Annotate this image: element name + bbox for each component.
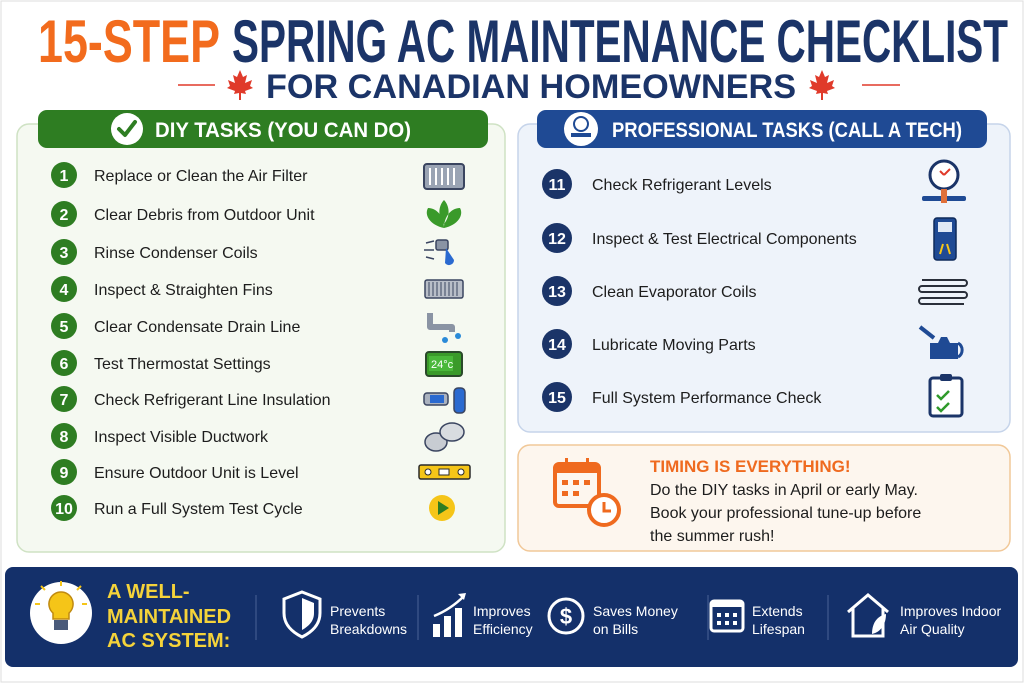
- list: DIY steps: Replace or Clean the Air Filter: [94, 168, 308, 185]
- banner: benefits: [5, 567, 1018, 667]
- callout: timing is everything: Book your professional tune-up before: [650, 505, 921, 522]
- benefit: improves efficiency: Improves: [473, 603, 531, 619]
- icons: DIY: [419, 164, 470, 521]
- benefit: improves indoor air quality: [848, 595, 1001, 637]
- icons: DIY: 24°c: [431, 359, 454, 371]
- list: professional steps: Clean Evaporator Coils: [592, 284, 757, 301]
- callout: timing is everything: [518, 445, 1010, 551]
- list: DIY steps: Inspect Visible Ductwork: [94, 429, 269, 446]
- list: professional steps: Lubricate Moving Parts: [592, 337, 756, 354]
- list: professional steps: Inspect & Test Electrical Components: [592, 231, 857, 248]
- heading: DIY tasks: DIY TASKS (YOU CAN DO): [155, 119, 411, 142]
- list: DIY steps: 6: [60, 356, 69, 373]
- list: professional steps: Check Refrigerant Levels: [592, 177, 772, 194]
- list: professional steps: 14: [548, 337, 566, 354]
- list: DIY steps: Check Refrigerant Line Insulation: [94, 392, 331, 409]
- list: DIY steps: Ensure Outdoor Unit is Level: [94, 465, 299, 482]
- list: professional steps: [542, 169, 857, 412]
- heading: professional tasks: [537, 110, 987, 148]
- list: DIY steps: Clear Condensate Drain Line: [94, 319, 300, 336]
- benefit: improves efficiency: [433, 593, 533, 637]
- list: professional steps: 11: [549, 177, 566, 194]
- heading: professional tasks: PROFESSIONAL TASKS (CALL A TECH): [612, 119, 962, 142]
- list: DIY steps: Run a Full System Test Cycle: [94, 501, 303, 518]
- panel: DIY tasks: [17, 110, 505, 552]
- list: DIY steps: Inspect & Straighten Fins: [94, 282, 273, 299]
- benefit: saves money: Saves Money: [593, 603, 678, 619]
- list: professional steps: Full System Performance Check: [592, 390, 822, 407]
- list: DIY steps: 10: [55, 501, 73, 518]
- benefit: extends lifespan: [711, 601, 805, 637]
- list: DIY steps: [51, 162, 331, 521]
- benefit: saves money: on Bills: [593, 621, 638, 637]
- icon: maple leaf right: [809, 70, 835, 100]
- benefit: saves money: [549, 599, 678, 637]
- list: DIY steps: 1: [60, 168, 69, 185]
- text: a well-maintained ac system: MAINTAINED: [107, 606, 231, 628]
- benefit: improves efficiency: Efficiency: [473, 621, 533, 637]
- callout: timing is everything: Do the DIY tasks in April or early May.: [650, 482, 918, 499]
- list: DIY steps: Rinse Condenser Coils: [94, 245, 258, 262]
- benefit: prevents breakdowns: Breakdowns: [330, 621, 407, 637]
- list: DIY steps: Clear Debris from Outdoor Unit: [94, 207, 315, 224]
- list: DIY steps: 7: [60, 392, 69, 409]
- icon: calendar clock: [555, 458, 619, 525]
- benefit: prevents breakdowns: [284, 592, 407, 637]
- icon: light bulb: [30, 581, 92, 644]
- text: a well-maintained ac system: [107, 581, 231, 652]
- subtitle: FOR CANADIAN HOMEOWNERS: [266, 68, 796, 106]
- icon: maple leaf left: [227, 70, 253, 100]
- callout: timing is everything: the summer rush!: [650, 528, 774, 545]
- text: a well-maintained ac system: A WELL-: [107, 581, 190, 603]
- list: DIY steps: 2: [60, 207, 69, 224]
- benefit: prevents breakdowns: Prevents: [330, 603, 385, 619]
- text: a well-maintained ac system: AC SYSTEM:: [107, 630, 230, 652]
- benefit: improves indoor air quality: Improves Indoor: [900, 603, 1001, 619]
- title: 15-STEP: [38, 8, 220, 75]
- benefit: extends lifespan: Extends: [752, 603, 803, 619]
- list: DIY steps: 4: [60, 282, 69, 299]
- benefit: extends lifespan: Lifespan: [752, 621, 805, 637]
- list: professional steps: 13: [548, 284, 566, 301]
- list: DIY steps: Test Thermostat Settings: [94, 356, 271, 373]
- list: DIY steps: 5: [60, 319, 69, 336]
- list: DIY steps: 9: [60, 465, 69, 482]
- list: DIY steps: 8: [60, 429, 69, 446]
- icons: professional: [919, 161, 967, 416]
- panel: professional tasks: [518, 110, 1010, 432]
- list: professional steps: 12: [548, 231, 566, 248]
- benefit: improves indoor air quality: Air Quality: [900, 621, 965, 637]
- list: professional steps: 15: [548, 390, 566, 407]
- heading: DIY tasks: [38, 110, 488, 148]
- benefit: saves money: $: [560, 604, 572, 629]
- callout: timing is everything: TIMING IS EVERYTHING!: [650, 457, 851, 476]
- list: DIY steps: 3: [60, 245, 69, 262]
